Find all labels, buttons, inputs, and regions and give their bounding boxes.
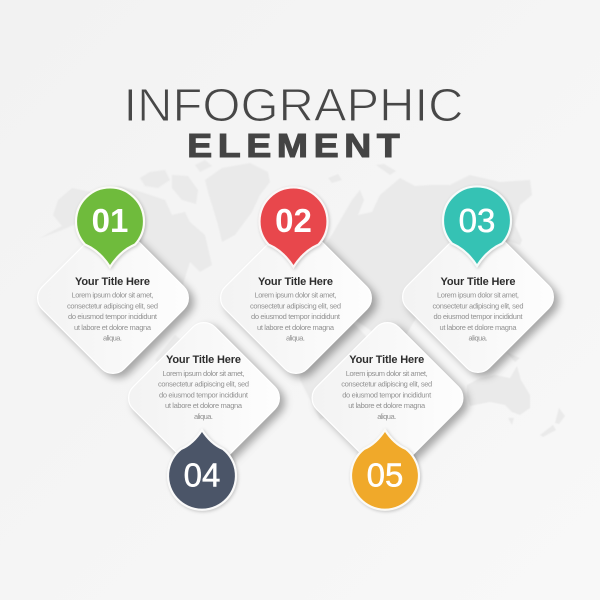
item title: Your Title Here — [258, 276, 333, 288]
item text: ut labore et dolore magna — [257, 323, 335, 332]
icon: pin 03 — [443, 186, 511, 266]
item title: Your Title Here — [440, 276, 516, 288]
item text: aliqua. — [194, 412, 213, 421]
panel: item 4 — [122, 316, 286, 510]
item text: aliqua. — [377, 412, 396, 421]
item title: Your Title Here — [349, 354, 424, 366]
item text: Lorem ipsum dolor sit amet, — [72, 290, 154, 300]
heading: infographic: INFOGRAPHIC — [124, 79, 463, 131]
item text: consectetur adipiscing elit, sed — [250, 301, 341, 310]
world map — [40, 160, 565, 450]
number 01: 01 — [92, 202, 128, 239]
item text: do eiusmod tempor incididunt — [434, 312, 523, 321]
icon: pin 01 — [76, 187, 144, 267]
item text: do eiusmod tempor incididunt — [159, 390, 249, 400]
item title: Your Title Here — [166, 354, 241, 366]
card — [122, 316, 286, 480]
panel: item 5 — [305, 316, 470, 510]
item text — [432, 290, 524, 342]
title — [124, 79, 463, 164]
number 02: 02 — [275, 202, 312, 239]
item text: ut labore et dolore magna — [165, 401, 243, 410]
item text: do eiusmod tempor incididunt — [68, 312, 158, 321]
item text: ut labore et dolore magna — [348, 401, 426, 410]
number 03: 03 — [459, 202, 495, 239]
item text: Lorem ipsum dolor sit amet, — [346, 369, 428, 378]
item text — [158, 369, 249, 421]
panel: item 3 — [396, 186, 560, 379]
item title: Your Title Here — [75, 276, 150, 288]
item text: aliqua. — [286, 334, 305, 342]
number 04: 04 — [184, 456, 220, 494]
item text: consectetur adipiscing elit, sed — [67, 301, 158, 310]
item text — [250, 290, 341, 342]
item text — [341, 369, 432, 421]
item text: aliqua. — [103, 334, 122, 342]
item text: Lorem ipsum dolor sit amet, — [437, 290, 519, 300]
icon: pin 02 — [260, 187, 328, 267]
card — [305, 316, 470, 480]
item text: ut labore et dolore magna — [440, 323, 517, 332]
card — [214, 216, 378, 380]
icon: pin 05 — [351, 430, 419, 510]
card — [396, 215, 560, 379]
item text: Lorem ipsum dolor sit amet, — [254, 290, 336, 300]
panel: item 1 — [31, 187, 195, 380]
item text: consectetur adipiscing elit, sed — [432, 301, 524, 310]
item text — [67, 290, 158, 342]
item text: do eiusmod tempor incididunt — [342, 390, 432, 400]
item text: Lorem ipsum dolor sit amet, — [162, 369, 244, 378]
heading: element: ELEMENT — [187, 128, 400, 164]
item text: consectetur adipiscing elit, sed — [341, 380, 432, 389]
number 05: 05 — [367, 456, 403, 494]
item text: ut labore et dolore magna — [74, 323, 152, 332]
icon: pin 04 — [168, 430, 236, 510]
item text: do eiusmod tempor incididunt — [251, 312, 341, 321]
card — [31, 216, 195, 380]
panel: item 2 — [214, 187, 378, 380]
item text: aliqua. — [468, 334, 488, 342]
item text: consectetur adipiscing elit, sed — [158, 380, 249, 389]
